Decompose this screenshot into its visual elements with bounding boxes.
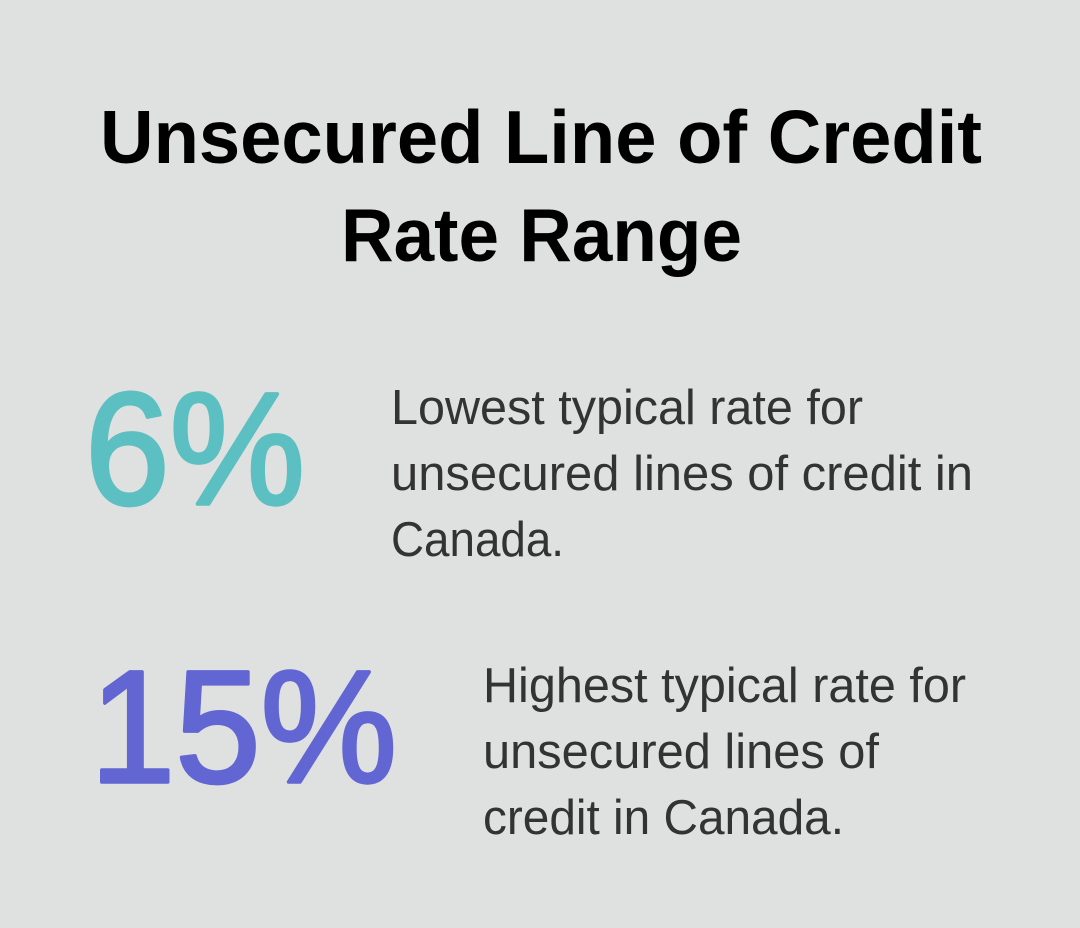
description: lowest rate: Canada.: [391, 513, 564, 567]
description: highest rate: Highest typical rate for: [483, 659, 966, 713]
title: Rate Range: [341, 193, 742, 277]
description: lowest rate: unsecured lines of credit in: [391, 447, 973, 501]
description: highest rate: [483, 659, 966, 845]
description: lowest rate: Lowest typical rate for: [391, 381, 863, 435]
description: lowest rate: [391, 381, 973, 567]
description: highest rate: unsecured lines of: [483, 725, 879, 779]
title: [100, 95, 982, 277]
description: highest rate: credit in Canada.: [483, 791, 844, 845]
title: Unsecured Line of Credit: [100, 95, 982, 179]
number: 6%: 6%: [85, 359, 305, 538]
number: 15%: 15%: [90, 637, 397, 816]
stat: 6% lowest rate: [85, 359, 973, 567]
stat: 15% highest rate: [90, 637, 966, 845]
